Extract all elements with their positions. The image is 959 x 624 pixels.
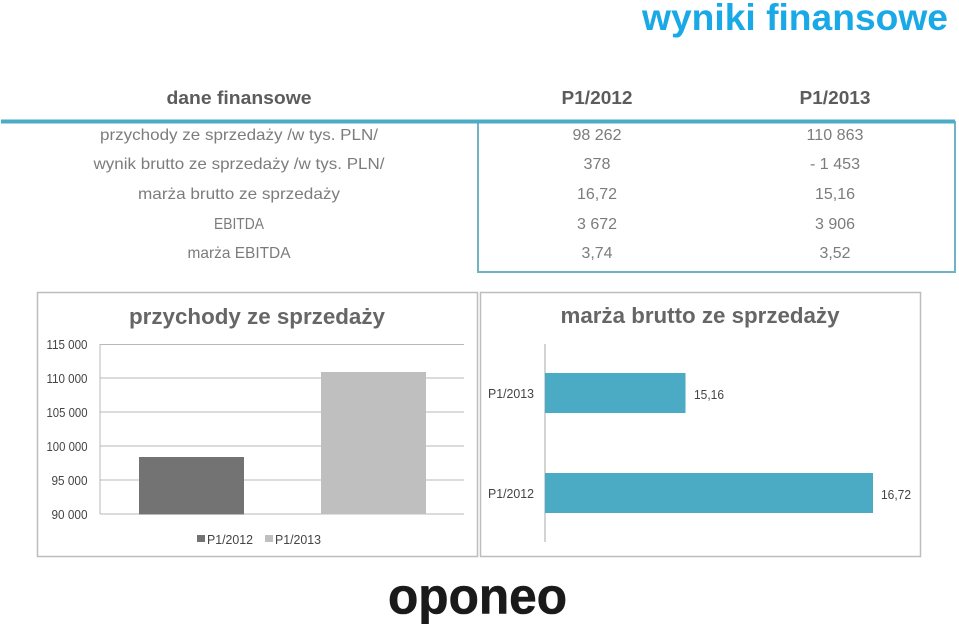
bar P1/2012 margin bbox=[545, 473, 873, 513]
values P1/2012: 378 bbox=[584, 156, 611, 173]
bar P1/2013 bbox=[321, 372, 426, 514]
row labels: marża brutto ze sprzedaży bbox=[138, 186, 340, 203]
values P1/2012: 3,74 bbox=[582, 245, 613, 262]
legend: P1/2012 bbox=[207, 533, 253, 547]
category and value labels bbox=[488, 387, 911, 502]
row labels: EBITDA bbox=[214, 216, 264, 233]
bar P1/2013 margin bbox=[545, 373, 686, 413]
category and value labels: P1/2013 bbox=[488, 387, 534, 401]
y axis labels: 100 000 bbox=[46, 440, 88, 454]
y axis labels: 90 000 bbox=[52, 508, 88, 522]
legend: P1/2013 bbox=[275, 533, 321, 547]
panel: revenue chart bbox=[38, 292, 478, 556]
table header: P1/2012 bbox=[562, 88, 632, 108]
values P1/2013: 3 906 bbox=[815, 216, 855, 233]
chart title: gross margin: marża brutto ze sprzedaży bbox=[560, 303, 840, 328]
y axis labels: 105 000 bbox=[46, 406, 88, 420]
category and value labels: P1/2012 bbox=[488, 487, 534, 501]
legend bbox=[197, 533, 321, 547]
panel: gross margin chart bbox=[480, 292, 920, 556]
values P1/2012: 16,72 bbox=[577, 186, 617, 203]
panel: financial data table bbox=[1, 88, 955, 272]
category and value labels: 15,16 bbox=[694, 388, 724, 402]
bar P1/2012 bbox=[139, 457, 244, 514]
values P1/2013: 3,52 bbox=[820, 245, 851, 262]
row labels: marża EBITDA bbox=[188, 245, 291, 262]
row labels: wynik brutto ze sprzedaży /w tys. PLN/ bbox=[92, 156, 385, 173]
values P1/2013: 110 863 bbox=[806, 127, 864, 144]
values P1/2012 bbox=[572, 127, 622, 262]
table header bbox=[166, 88, 870, 108]
values P1/2013: - 1 453 bbox=[810, 156, 860, 173]
y axis labels: 110 000 bbox=[46, 372, 88, 386]
chart title: revenue: przychody ze sprzedaży bbox=[129, 304, 386, 329]
y axis labels bbox=[46, 338, 88, 522]
values P1/2013: 15,16 bbox=[815, 186, 855, 203]
values P1/2012: 3 672 bbox=[577, 216, 617, 233]
table header: dane finansowe bbox=[166, 88, 312, 108]
values P1/2013 bbox=[806, 127, 864, 262]
values P1/2012: 98 262 bbox=[572, 127, 622, 144]
y axis labels: 115 000 bbox=[46, 338, 88, 352]
category and value labels: 16,72 bbox=[881, 488, 911, 502]
y axis labels: 95 000 bbox=[52, 474, 88, 488]
row labels bbox=[92, 127, 385, 262]
logo: oponeo: oponeo bbox=[388, 568, 567, 624]
table header: P1/2013 bbox=[800, 88, 870, 108]
row labels: przychody ze sprzedaży /w tys. PLN/ bbox=[100, 127, 379, 144]
